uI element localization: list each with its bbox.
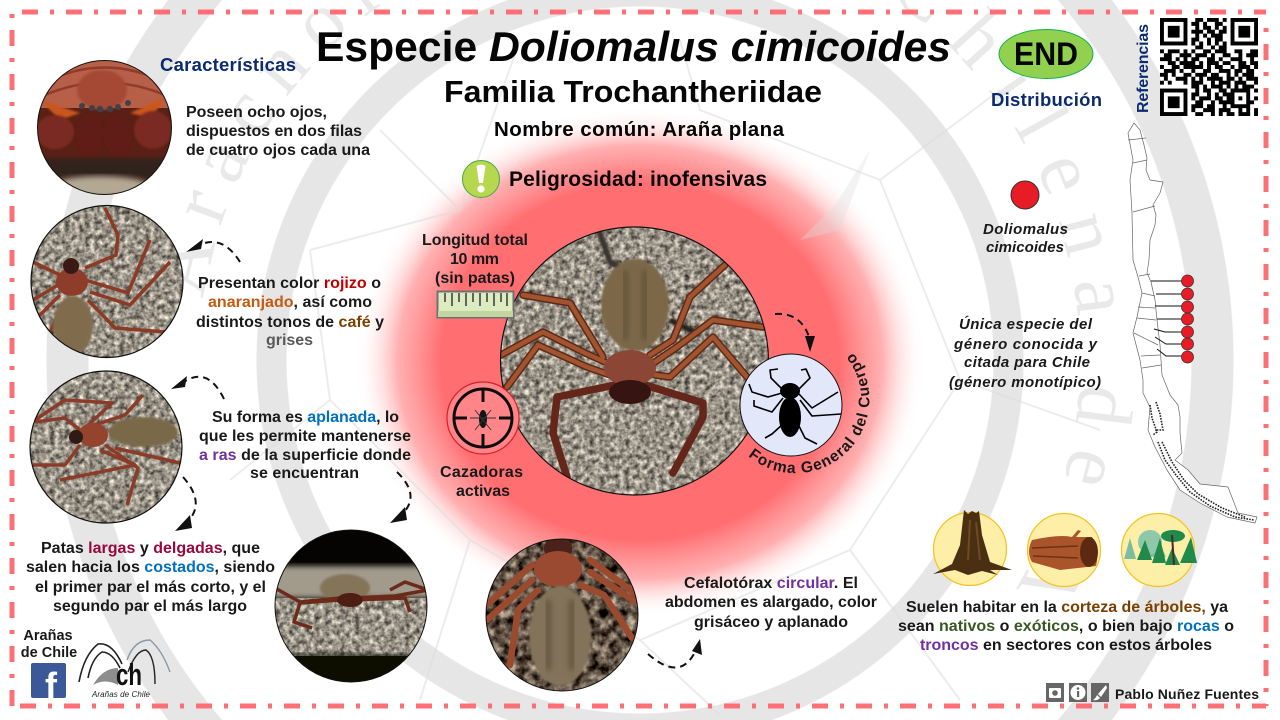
icon: warning [462, 160, 500, 198]
credits [1046, 683, 1259, 702]
red glow behind main photo [340, 90, 940, 630]
text: legs: salen hacia los costados, siendo [26, 559, 275, 576]
main spider photo [500, 226, 770, 496]
text: hunters: Cazadoras [440, 464, 523, 481]
length label: Longitud total [422, 232, 528, 249]
text: eyes: dispuestos en dos filas [186, 123, 362, 140]
heading: distribución: Distribución [991, 89, 1102, 110]
label: de Chile [21, 645, 77, 661]
logo: ch [116, 657, 142, 692]
text: flattened shape: a ras de la superficie donde [199, 447, 411, 464]
icon: info [1069, 683, 1087, 702]
icon: tree stump [933, 510, 1012, 586]
text: monotypic genus: Única especie del [959, 315, 1093, 333]
text: monotypic genus [949, 315, 1101, 391]
text: hunters [440, 464, 523, 500]
arrow: to frontal photo [390, 472, 411, 523]
text: eyes: Poseen ocho ojos, [186, 104, 327, 121]
photo: dorsal close-up [485, 535, 639, 692]
photo: flattened side view [29, 370, 183, 524]
text: flattened shape: Su forma es aplanada, lo [212, 409, 399, 426]
badge: END endemic [999, 30, 1093, 78]
arrow: to legs text [175, 477, 196, 531]
length label [422, 232, 528, 287]
icon: active hunter target [447, 382, 519, 454]
legend: species name: cimicoides [986, 239, 1064, 256]
text: flattened shape: se encuentran [250, 465, 359, 482]
logo [79, 640, 170, 699]
icon: brush [1091, 683, 1109, 702]
southern islands [1150, 402, 1254, 520]
arrow: to body shape [775, 314, 815, 352]
record dots [1182, 275, 1194, 363]
text: habitat: Suelen habitar en la corteza de árboles, ya [906, 599, 1228, 616]
text: habitat [898, 599, 1234, 654]
icon: facebook: f [45, 665, 58, 706]
danger level [462, 160, 767, 198]
text: colour [196, 275, 384, 349]
text: cephalothorax: Cefalotórax circular. El [684, 575, 858, 592]
danger text: Peligrosidad: inofensivas [509, 168, 767, 191]
text: habitat: sean nativos o exóticos, o bien bajo rocas o [898, 618, 1234, 635]
text: colour: grises [266, 332, 313, 349]
text: eyes [186, 104, 370, 159]
length label: 10 mm [450, 251, 499, 268]
text: monotypic genus: citada para Chile [964, 354, 1090, 371]
arrow: to dorsal photo [648, 639, 702, 668]
logo: Arañas de Chile [91, 690, 151, 699]
arrow: to flat photo [171, 376, 224, 399]
text: legs [26, 540, 275, 615]
arrow: to colour photo [186, 239, 240, 262]
text: eyes: de cuatro ojos cada una [186, 142, 370, 159]
label: Arañas [23, 628, 73, 644]
text: colour: Presentan color rojizo o [198, 275, 381, 292]
text: monotypic genus: (género monotípico) [949, 374, 1101, 391]
text: flattened shape: que les permite mantenerse [199, 428, 411, 445]
heading: características: Características [160, 54, 296, 75]
photo: eyes close-up [36, 60, 173, 198]
map outline [1128, 123, 1257, 523]
map of Chile with records [1128, 123, 1257, 523]
text: colour: anaranjado, así como [208, 294, 372, 311]
text: colour: distintos tonos de café y [196, 314, 384, 331]
watermark web lines [230, 40, 1100, 715]
legend: species name: Doliomalus [983, 221, 1068, 238]
curved label: Forma General del Cuerpo: Forma General del Cuerpo [748, 354, 870, 474]
subtitle: family: Familia Trochantheriidae [444, 74, 822, 109]
text: cephalothorax [665, 575, 877, 631]
photo: frontal low view [270, 530, 434, 685]
label [21, 628, 77, 661]
text: hunters: activas [456, 483, 510, 500]
text: legs: segundo par el más largo [53, 598, 247, 615]
text: monotypic genus: género conocida y [953, 336, 1098, 353]
common name: Nombre común: Araña plana [494, 118, 785, 141]
badge: END endemic: END [1014, 36, 1078, 72]
text: flattened shape [199, 409, 411, 482]
icon: forest [1122, 514, 1197, 586]
author: Pablo Nuñez Fuentes [1115, 686, 1259, 702]
text: habitat: troncos en sectores con estos árboles [920, 637, 1212, 654]
icon: camera [1046, 683, 1064, 702]
length label: (sin patas) [435, 270, 515, 287]
text: legs: Patas largas y delgadas, que [41, 540, 260, 557]
QR code [1160, 18, 1258, 116]
heading: referencias: Referencias [1135, 24, 1152, 113]
icon: general body shape [740, 354, 842, 456]
text: cephalothorax: grisáceo y aplanado [694, 614, 848, 631]
icon: ruler [438, 292, 514, 318]
photo: dorsal colour [30, 205, 184, 359]
text: legs: el primer par el más corto, y el [35, 579, 266, 596]
legend: red dot [1011, 181, 1039, 209]
icon: facebook [31, 663, 66, 706]
brand: Arañas de Chile [21, 628, 170, 706]
text: cephalothorax: abdomen es alargado, color [665, 594, 877, 611]
legend: species name [983, 221, 1068, 256]
leader lines [1151, 281, 1182, 356]
title: Especie Doliomalus cimicoides [316, 23, 951, 70]
icon: hollow log [1028, 514, 1100, 586]
